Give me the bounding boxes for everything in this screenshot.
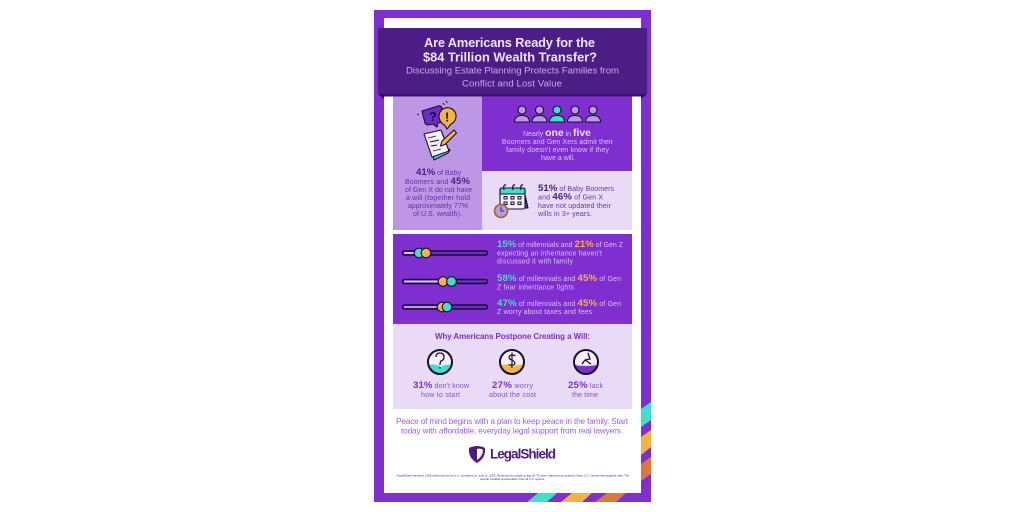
icon: speech bubbles and document: ! [445,110,449,124]
reason: lack the time: 25% lack [568,380,604,391]
text: do not have a will: a will (together hold [406,195,470,202]
reason: lack the time [568,350,604,399]
panel: wills not updated [482,171,632,230]
subtitle: Discussing Estate Planning Protects Families from [406,66,619,76]
text: inheritance fights: 58% of millennials and 45% of Gen [497,273,621,284]
text: inheritance fights: Z fear inheritance fights [497,284,574,292]
text: nearly one in five: family doesn't even know if they [506,147,610,154]
text: haven't discussed [497,239,624,266]
title [423,35,597,64]
subtitle [406,66,619,90]
reason: worry about cost [489,350,536,399]
footnote [396,474,629,481]
footnote: *LegalShield surveyed 1,506 adults across the U.S. completed on June 11, 2025. Respondents ranged in age 20-75 years, balanced according to basic U.S. Census demographic data. The [396,474,629,478]
text: taxes and fees: Z worry about taxes and fees [497,309,592,316]
text: do not have a will: approximately 77% [408,203,468,210]
logo: LegalShield: LegalShield [490,446,556,462]
callout: peace of mind: Peace of mind begins with a plan to keep peace in the family. Start [396,416,629,426]
text: taxes and fees [497,298,621,316]
footnote: sample included representation from all U.S. regions. [480,477,545,481]
text: do not have a will: of U.S. wealth). [413,211,462,218]
title: $84 Trillion Wealth Transfer? [423,50,597,64]
reason: don't know how to start: 31% don't know [413,380,470,391]
icon: speech bubbles and document [417,101,456,160]
text: nearly one in five: Nearly one in five [523,127,591,139]
icon: speech bubbles and document: ? [429,109,437,124]
text: nearly one in five: have a will. [541,155,575,162]
decorative stripes [527,402,651,502]
reason: worry about cost: about the cost [489,392,536,399]
callout: peace of mind: today with affordable, everyday legal support from real lawyers. [401,426,623,436]
text: 51 and 46 percent: have not updated their [538,203,612,210]
text: nearly one in five: Boomers and Gen Xers admit their [502,139,614,146]
text: 51 and 46 percent: and 46% of Gen X [538,192,603,202]
icon: calendar and clock [494,185,528,218]
text: 51 and 46 percent: wills in 3+ years. [537,211,592,218]
text: do not have a will: 41% of Baby [416,167,462,178]
slider: 15 and 21 percent [402,248,488,258]
text: inheritance fights [497,273,621,292]
reason: don't know how to start [413,350,470,399]
text: 51 and 46 percent: 51% of Baby Boomers [538,183,614,194]
callout: peace of mind [396,416,629,436]
slider: 47 and 45 percent [402,302,488,312]
text: haven't discussed: discussed it with family [497,258,574,266]
reason: lack the time: the time [572,392,598,399]
heading: why postpone: Why Americans Postpone Creating a Will: [435,332,590,341]
text: do not have a will: Boomers and 45% [405,176,470,187]
text: taxes and fees: 47% of millennials and 45% of Gen [497,298,621,309]
slider: 58 and 45 percent [402,277,488,286]
panel: left will statistic [393,96,482,230]
text: haven't discussed: 15% of millennials and 21% of Gen Z [497,239,624,250]
logo: LegalShield [469,446,556,463]
text: nearly one in five [502,127,614,162]
text: haven't discussed: expecting an inheritance haven't [497,250,602,258]
background frame [374,10,651,502]
panel: one in five [482,96,632,171]
subtitle: Conflict and Lost Value [462,78,562,90]
title banner [378,28,647,99]
text: do not have a will [405,167,472,218]
text: do not have a will: of Gen X do not have [405,187,472,194]
reason: worry about cost: 27% worry [492,380,534,391]
panel: sliders [393,234,632,324]
panel: why Americans postpone [393,324,632,409]
reason: don't know how to start: how to start [421,392,460,399]
icon: row of people [514,106,600,122]
title: Are Americans Ready for the [424,35,595,50]
text: 51 and 46 percent [537,183,614,218]
